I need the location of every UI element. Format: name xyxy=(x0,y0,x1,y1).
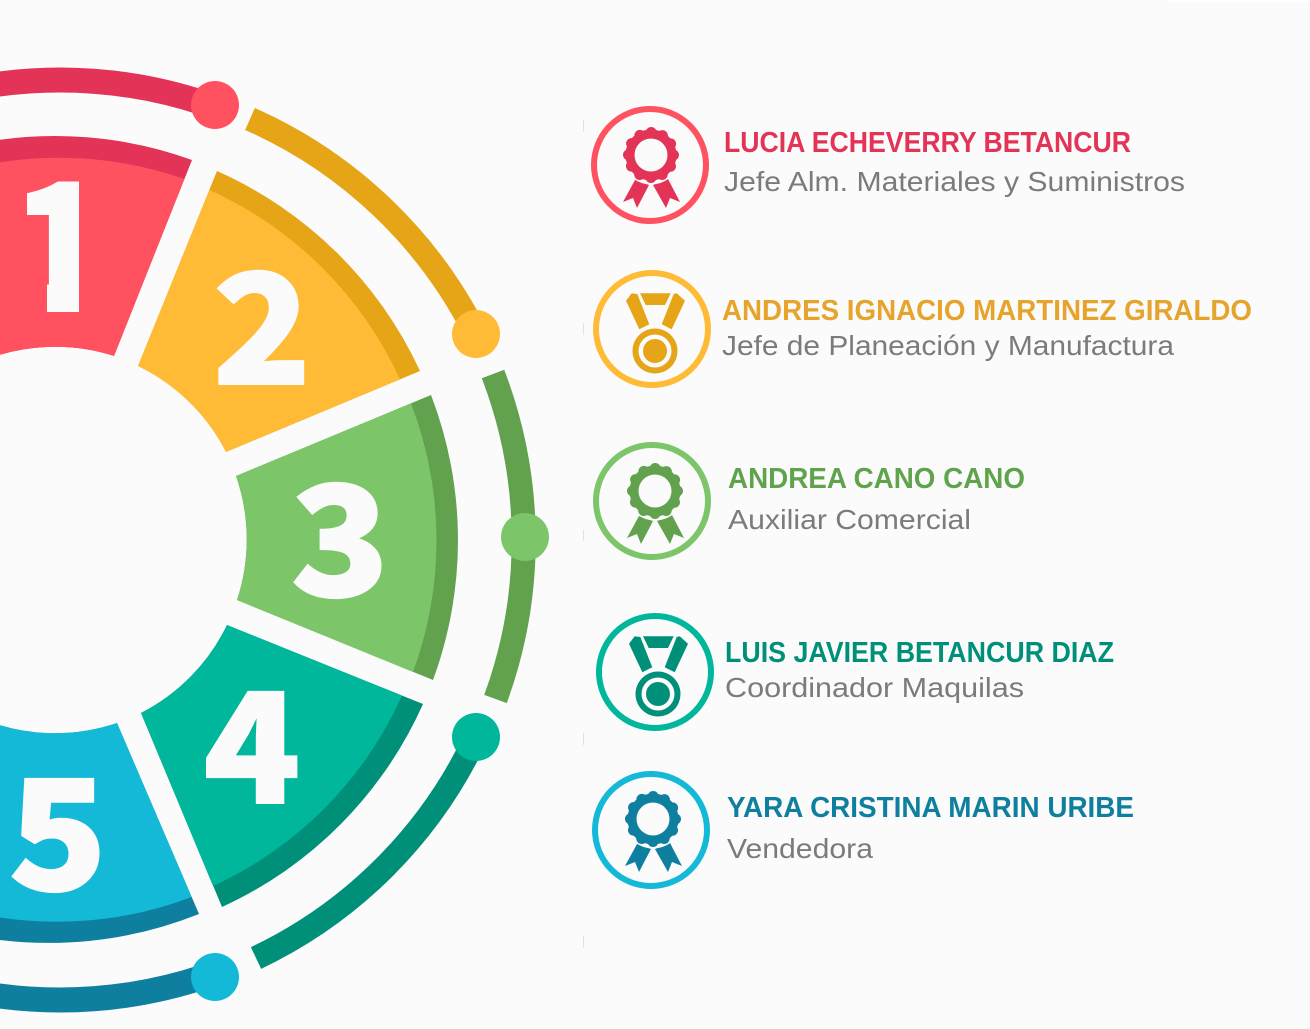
digit 1: 1 xyxy=(8,106,116,362)
wedge 1 xyxy=(0,136,192,356)
icon: rosette ribbon red xyxy=(594,109,706,221)
icon: medal teal xyxy=(599,616,711,728)
name 4: LUIS JAVIER BETANCUR DIAZ xyxy=(725,637,1114,669)
list item 3 xyxy=(596,445,1025,557)
digit 4: 4 xyxy=(204,626,300,847)
outer ring segment 4 xyxy=(256,713,500,958)
role 4: Coordinador Maquilas xyxy=(725,672,1024,703)
outer ring segment 3 xyxy=(493,374,549,699)
wedge 3 xyxy=(236,395,458,680)
outer ring segment 2 xyxy=(250,119,500,358)
icon: rosette ribbon green xyxy=(596,445,708,557)
wheel diagram xyxy=(0,80,549,1001)
role 5: Vendedora xyxy=(727,833,873,864)
outer ring segment 5 xyxy=(0,953,239,1001)
digit 3: 3 xyxy=(291,419,389,641)
wedge 5 xyxy=(0,713,199,943)
digit 5: 5 xyxy=(9,713,107,935)
icon: medal yellow xyxy=(596,273,708,385)
icon: rosette ribbon blue xyxy=(595,774,707,886)
list item 2 xyxy=(596,273,1252,385)
wedge 4 xyxy=(141,625,423,907)
role 1: Jefe Alm. Materiales y Suministros xyxy=(724,166,1185,197)
name 5: YARA CRISTINA MARIN URIBE xyxy=(727,792,1134,824)
role 2: Jefe de Planeación y Manufactura xyxy=(722,330,1174,361)
name 3: ANDREA CANO CANO xyxy=(728,463,1025,495)
name 2: ANDRES IGNACIO MARTINEZ GIRALDO xyxy=(722,295,1252,327)
list item 1 xyxy=(594,109,1185,221)
role 3: Auxiliar Comercial xyxy=(728,504,971,535)
wedge 2 xyxy=(138,171,420,452)
digit 2: 2 xyxy=(213,207,311,429)
list item 4 xyxy=(599,616,1114,728)
list item 5 xyxy=(595,774,1134,886)
outer ring segment 1 xyxy=(0,80,239,129)
name 1: LUCIA ECHEVERRY BETANCUR xyxy=(724,127,1131,159)
